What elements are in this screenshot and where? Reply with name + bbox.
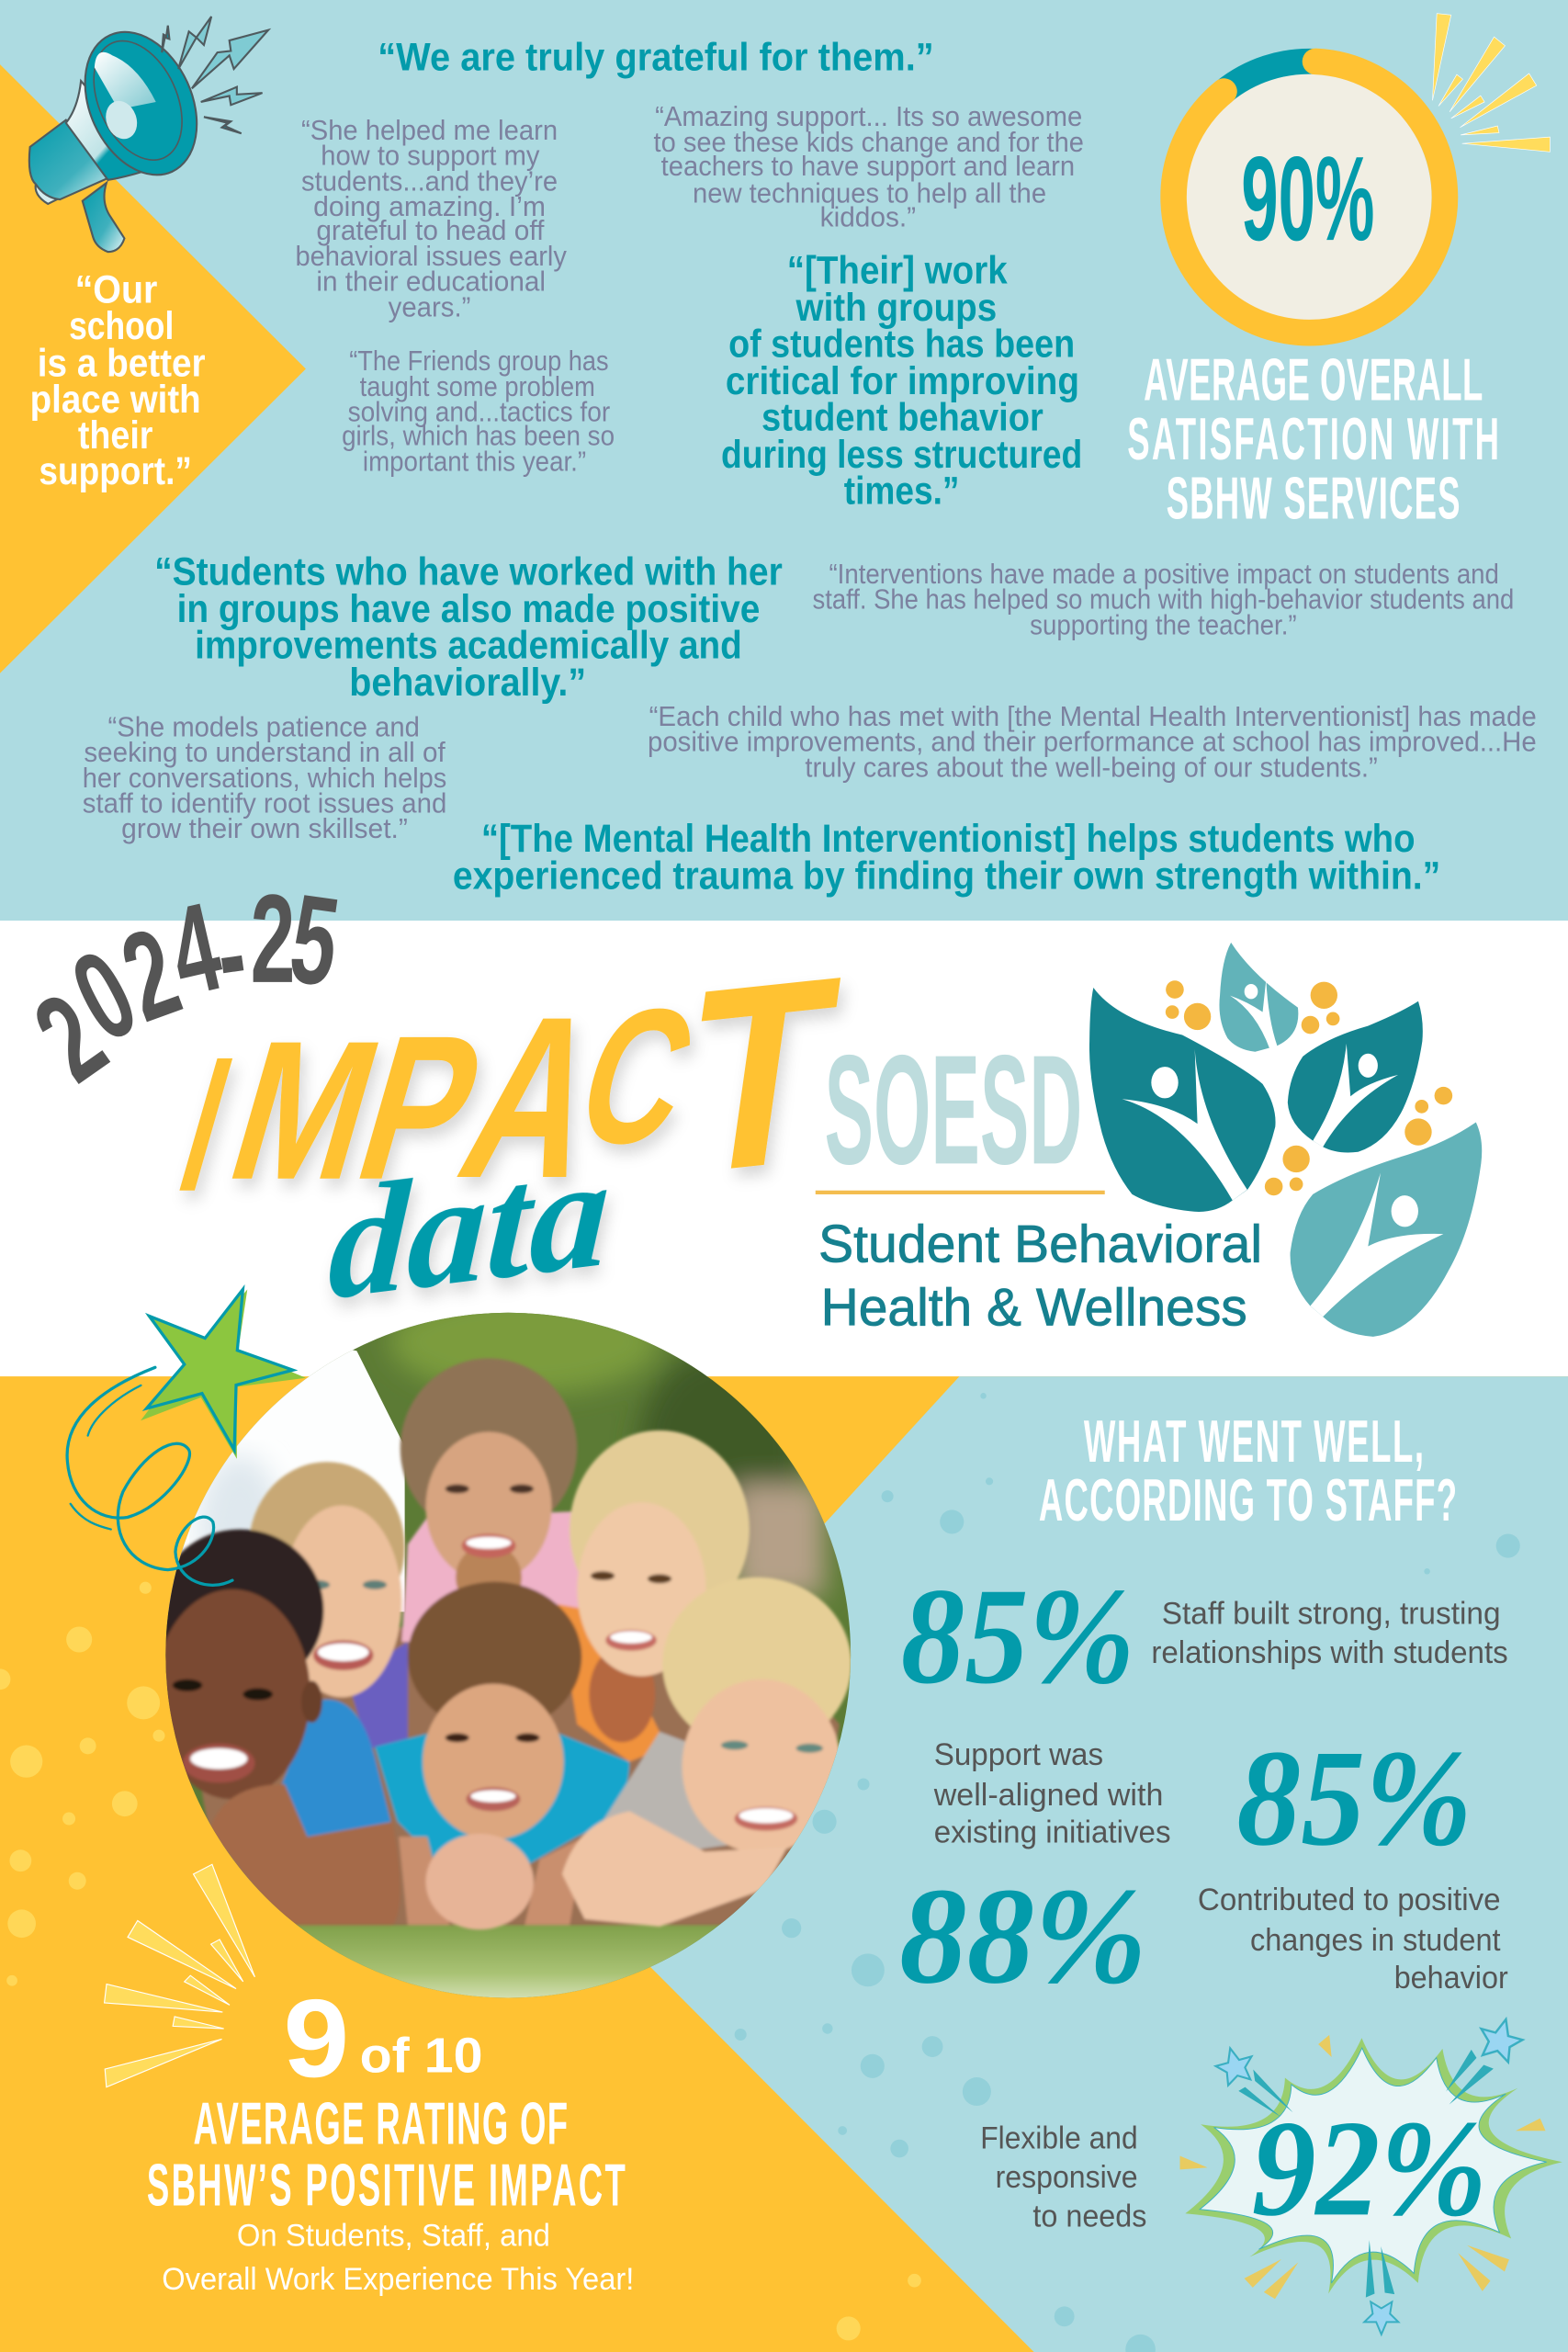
title: 2024-25: 2 [12,967,129,1108]
title: 2024-25: 4 [158,876,233,1023]
stat: 9 of 10 rating: AVERAGE RATING OF [194,2091,568,2157]
panel: top quotes background [0,0,1568,921]
title: IMPACT brush lettering: I [161,1017,252,1231]
stat: 85 percent relationships: Staff built strong, trusting [1162,1596,1501,1631]
quote: Their work with groups: times.” [844,469,959,512]
quote: She helped me learn: students...and they’re [301,166,558,197]
photo: group of smiling children in circle [150,1289,870,2009]
quote: interventions: staff. She has helped so much with high-behavior students and [813,585,1514,616]
yellow triangle [0,64,306,673]
logo: SOESD Student Behavioral Health and Wellness: SOESD [825,1022,1082,1196]
quote: She helped me learn: doing amazing. I’m [313,192,546,222]
chart: 90 percent donut: 90% [1241,131,1374,266]
quote: Amazing support: new techniques to help all the [693,178,1046,209]
logo: SOESD Student Behavioral Health and Wellness [816,943,1482,1338]
quote: she models patience: “She models patience and [108,712,420,742]
quote: our school is better: support.” [39,449,192,492]
title: IMPACT brush lettering: A [438,969,630,1227]
icon: white and yellow rays near rating [105,1864,254,2087]
quote: Their work with groups: student behavior [761,395,1043,438]
burst stars [1213,2014,1527,2335]
stat: 9 of 10 rating: Overall Work Experience This Year! [162,2262,634,2297]
logo subtitle [818,1215,1262,1338]
stat: 88 percent behavior [899,1860,1508,2012]
stat: 85 percent aligned: existing initiatives [934,1815,1171,1850]
child: left blonde girl [249,1462,408,1754]
child: centre boy [375,1582,629,1929]
stat: 85 percent relationships [901,1560,1508,1713]
shaded base between children [180,1619,840,1925]
quote: our school is better: place with [30,378,201,421]
stat: 85 percent aligned [933,1722,1472,1874]
quote: She helped me learn: in their educational [316,267,546,298]
quote: students who have worked: “Students who have worked with her [154,549,783,593]
quote: Amazing support: to see these kids change and for the [654,128,1084,158]
quote: each child [648,702,1537,783]
quote: each child: “Each child who has met with [the Mental Health Interventionist] has made [649,702,1537,732]
stat: 92 percent burst: 92% [1252,2092,1487,2245]
quote: Their work with groups: during less structured [721,433,1082,476]
burst accents [1179,2035,1546,2299]
heading: average overall satisfaction [1127,347,1499,532]
title: IMPACT brush lettering: M [209,1000,401,1220]
quote: Friends group [342,346,615,477]
quote: Amazing support: teachers to have support and learn [661,152,1075,182]
quote: she models patience: grow their own skillset.” [121,814,408,844]
quote: interventions [813,560,1514,640]
title: 2024-25: 0 [51,923,157,1069]
quote: interventions: “Interventions have made a positive impact on students and [829,560,1499,590]
heading: We are truly grateful: “We are truly grateful for them.” [378,36,934,79]
quote: Their work with groups: with groups [795,286,997,329]
quote: mental health interventionist [453,817,1440,898]
stat: 9 of 10 rating: SBHW’S POSITIVE IMPACT [147,2153,626,2219]
icon: yellow rays by donut [1432,14,1550,152]
stat: 85 percent relationships: relationships with students [1151,1635,1508,1670]
quote: She helped me learn: years.” [389,292,470,322]
quote: She helped me learn: grateful to head off [316,216,545,246]
quote: our school is better [30,268,206,492]
quote: Amazing support [654,102,1084,232]
quote: Their work with groups: critical for improving [726,359,1079,402]
stat: 85 percent relationships: 85% [901,1560,1134,1713]
quote: She helped me learn [295,116,568,322]
quote: She helped me learn: how to support my [321,141,540,172]
quote: She helped me learn: “She helped me learn [301,116,558,146]
quote: our school is better: “Our [75,268,157,311]
quote: Friends group: taught some problem [360,372,595,402]
logo subtitle: Student Behavioral [818,1215,1262,1273]
title: IMPACT brush lettering: C [558,969,716,1184]
stat: 92 percent burst [1179,2014,1562,2335]
title: IMPACT brush lettering: T [670,920,852,1230]
stat: 88 percent behavior: Contributed to positive [1198,1883,1501,1917]
heading: what went well: ACCORDING TO STAFF? [1039,1467,1457,1534]
title: IMPACT brush lettering [161,920,852,1231]
child: right boy [562,1577,852,1927]
quote: Amazing support: kiddos.” [820,202,916,232]
stat: 9 of 10 rating: 9 [283,1976,349,2100]
quote: each child: truly cares about the well-being of our students.” [805,752,1378,783]
panel: yellow lower background [0,1376,1568,2352]
quote: she models patience: seeking to understand in all of [84,738,446,768]
icon: megaphone [29,14,268,252]
child: top girl [400,1359,581,1642]
stat label: flexible and responsive: Flexible and [980,2121,1138,2156]
logo leaves with figures [1089,943,1482,1337]
quote: Friends group: girls, which has been so [342,422,615,452]
stat: 85 percent aligned: Support was [934,1737,1103,1772]
logo subtitle: Health & Wellness [821,1279,1247,1338]
title: 2024-25 [12,868,346,1108]
title: 2024-25: - [209,883,254,1025]
panel: white title band [0,921,1568,1376]
title: 2024-25: 5 [283,868,346,1013]
title: data script: data [325,1123,614,1333]
quote: mental health interventionist: experienced trauma by finding their own strength within.” [453,854,1440,898]
title: 2024-25: 2 [106,901,196,1048]
stat: 85 percent aligned: well-aligned with [933,1778,1163,1813]
quote: she models patience [83,712,446,844]
quote: students who have worked [154,549,783,704]
quote: Their work with groups [721,248,1082,512]
child: right blonde girl [558,1430,750,1762]
heading: what went well [1039,1408,1457,1534]
quote: students who have worked: behaviorally.” [349,661,586,704]
quote: students who have worked: in groups have also made positive [177,587,760,630]
quote: our school is better: school [69,304,174,347]
quote: Amazing support: “Amazing support... Its so awesome [655,102,1082,132]
quote: She helped me learn: behavioral issues early [295,242,568,272]
decorative yellow dots [0,1582,921,2340]
stat: 88 percent behavior: changes in student [1250,1923,1501,1958]
stat: 88 percent behavior: behavior [1394,1961,1508,1996]
stat: 9 of 10 rating: of 10 [360,2028,482,2083]
burst rays [1238,2050,1494,2298]
quote: she models patience: staff to identify root issues and [83,789,446,820]
quote: Their work with groups: “[Their] work [787,248,1008,291]
icon: green star [141,1289,306,1459]
quote: Friends group: “The Friends group has [349,346,609,377]
heading: average overall satisfaction: SATISFACTION WITH [1127,406,1499,473]
stat: 88 percent behavior: 88% [899,1860,1146,2012]
quote: Their work with groups: of students has been [728,322,1075,365]
heading: average overall satisfaction: SBHW SERVICES [1167,466,1460,532]
icon: scribble swirl [67,1367,232,1585]
title: 2024-25: 2 [251,869,295,1010]
quote: our school is better: their [78,413,152,457]
quote: interventions: supporting the teacher.” [1030,610,1297,640]
title: IMPACT brush lettering: P [337,993,505,1222]
heading: what went well: WHAT WENT WELL, [1084,1408,1424,1476]
quote: each child: positive improvements, and their performance at school has improved...He [648,728,1537,758]
quote: mental health interventionist: “[The Mental Health Interventionist] helps students who [481,817,1416,860]
quote: students who have worked: improvements academically and [195,623,742,666]
quote: Friends group: important this year.” [363,447,586,477]
child: boy on the left [154,1530,400,1925]
quote: our school is better: is a better [38,342,206,385]
stat: 9 of 10 rating [147,1976,634,2297]
stat label: flexible and responsive: responsive [996,2160,1138,2195]
heading: average overall satisfaction: AVERAGE OVERALL [1144,347,1483,414]
panel: blue lower background [600,1376,1568,2352]
chart: 90 percent donut [1174,62,1445,333]
stat: 85 percent aligned: 85% [1236,1722,1472,1874]
stat: 9 of 10 rating: On Students, Staff, and [237,2219,550,2254]
decorative blue dots [735,1393,1520,2352]
quote: Friends group: solving and...tactics for [348,398,610,428]
stat label: flexible and responsive [980,2121,1146,2233]
quote: she models patience: her conversations, which helps [83,763,446,794]
stat label: flexible and responsive: to needs [1032,2199,1146,2233]
